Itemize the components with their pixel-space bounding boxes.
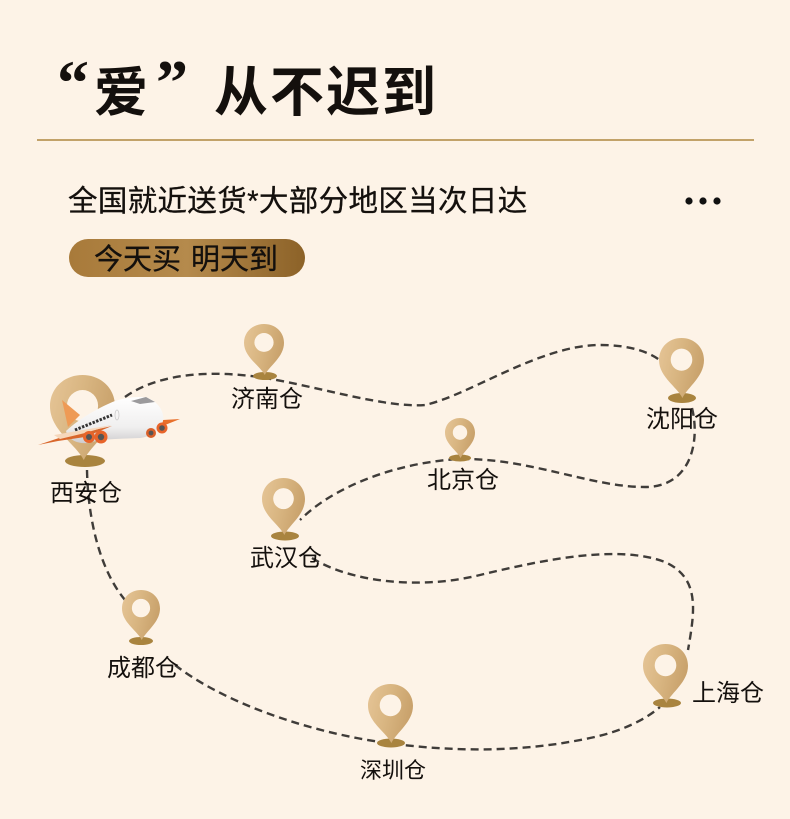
pin: Shenyang [659,338,704,403]
pin: Shanghai [643,644,688,708]
more dots icon [685,197,721,205]
label: Shenzhen: 深圳仓 [360,758,426,783]
label: Beijing: 北京仓 [427,467,499,494]
pin: Shenzhen [368,684,413,748]
icon: airplane [38,397,180,445]
badge: 明天到 [191,244,278,276]
title: quoted word: “ [57,47,89,118]
label: Jinan: 济南仓 [231,386,303,413]
title: quoted word: ” [156,47,188,118]
pin: Jinan [244,324,284,380]
title: quoted word: 爱 [94,63,148,123]
label: Shanghai: 上海仓 [692,680,764,707]
divider [37,139,754,141]
label: Xi'an: 西安仓 [50,480,122,507]
route [87,345,695,749]
subtitle: 全国就近送货*大部分地区当次日达 [68,185,528,218]
label: Shenyang: 沈阳仓 [646,406,718,433]
pin: Wuhan [262,478,305,540]
label: Wuhan: 武汉仓 [250,545,322,572]
pin: Chengdu [122,590,160,645]
pin: Beijing [445,418,475,462]
title: main: 从不迟到 [214,63,438,123]
label: Chengdu: 成都仓 [107,655,179,682]
badge: 今天买 [94,243,181,276]
badge [69,239,305,277]
title: quoted word [57,47,188,123]
pin: Xi'an [50,375,115,467]
